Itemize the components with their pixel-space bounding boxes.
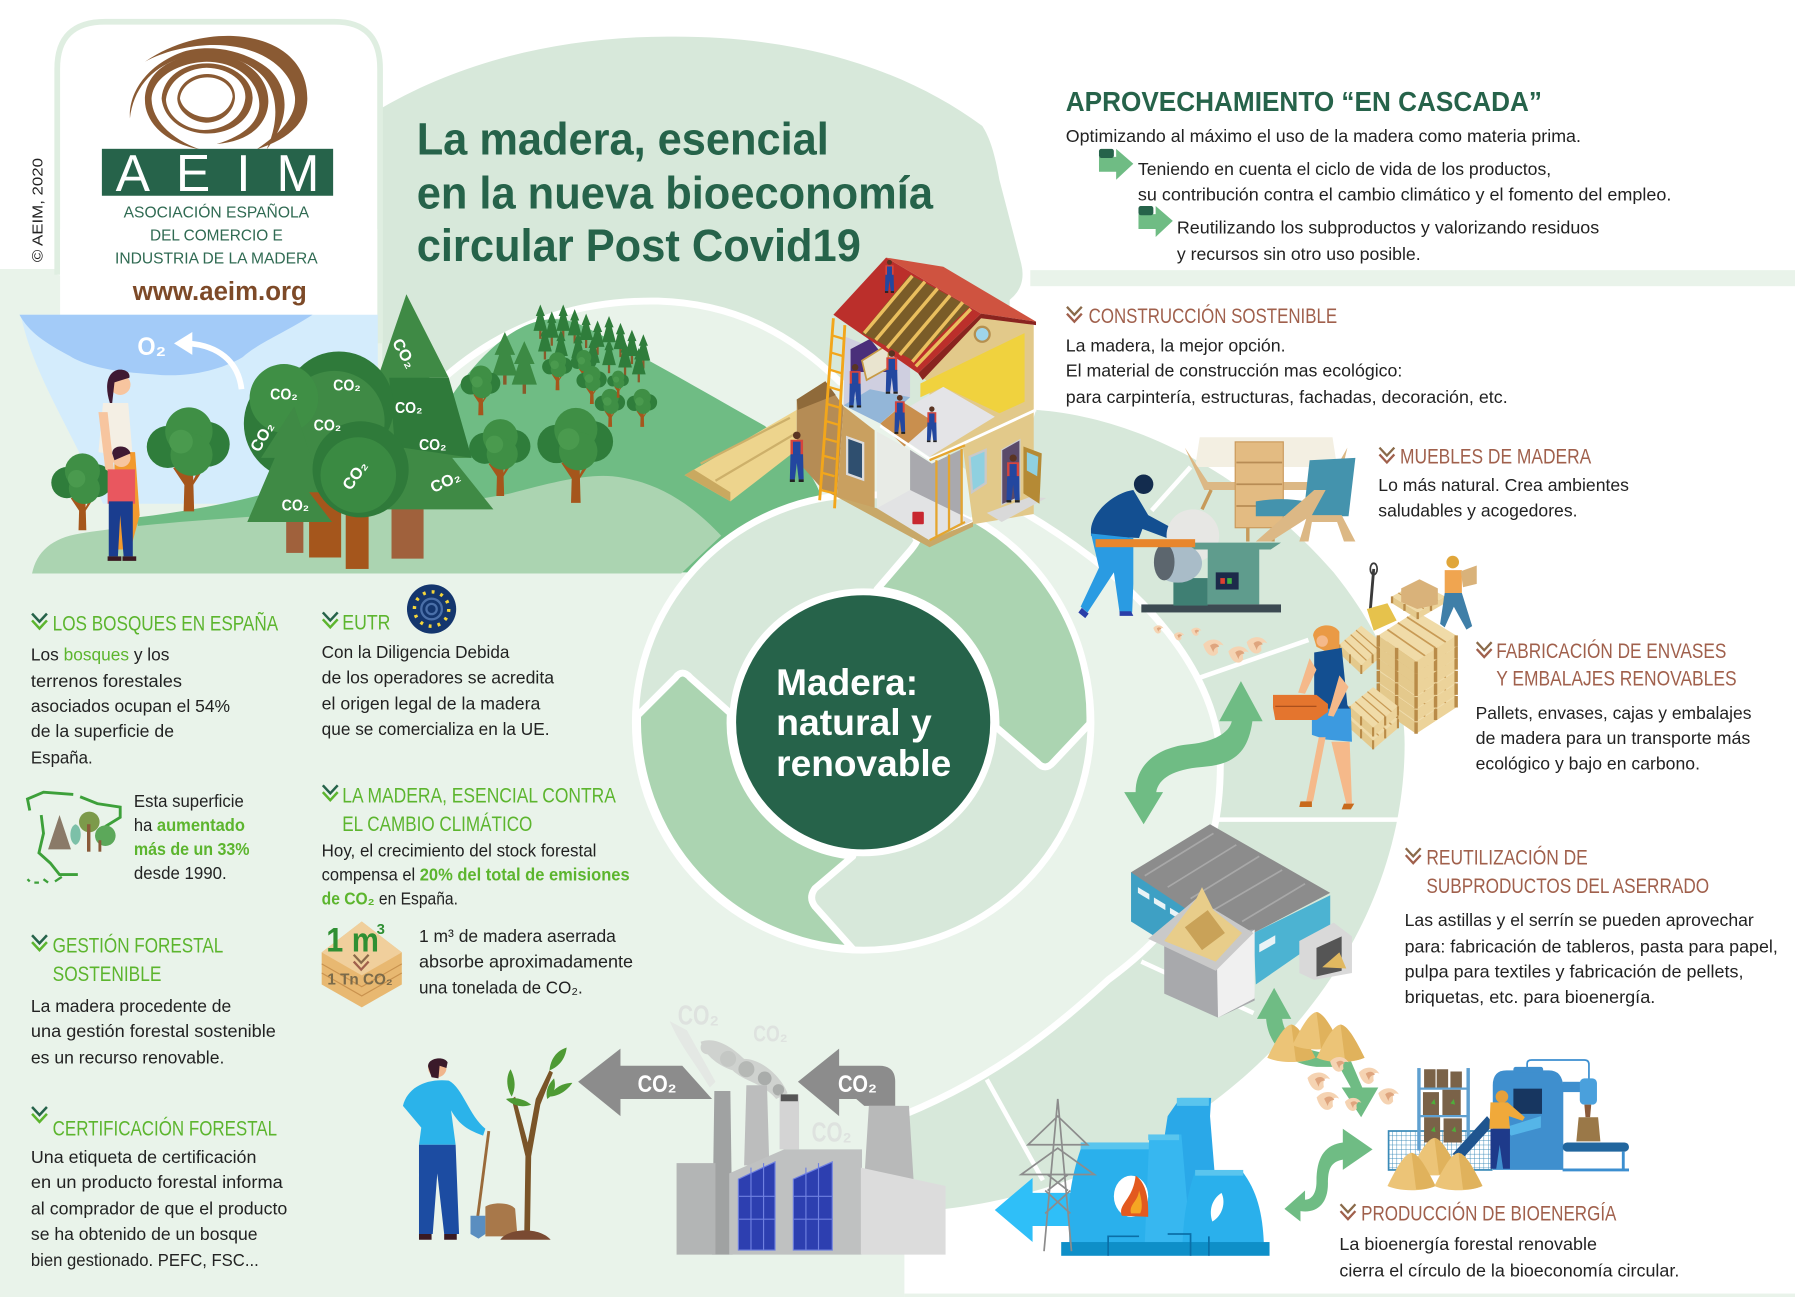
logo web address: www.aeim.org [132,276,307,306]
saw machine [1096,509,1281,612]
section: reutilización de subproductos: para: fabricación de tableros, pasta para papel, [1405,936,1778,956]
sawdust piles [1267,1012,1365,1062]
upper white arc [444,301,841,383]
right CO2 arrow [798,1049,895,1116]
section: fabricación de envases [1476,638,1752,773]
leaf [1211,1193,1223,1221]
CO2 tree labels: CO₂ [395,399,422,417]
section: los bosques en España: España. [31,748,93,768]
radial dividers [987,467,1400,1180]
furniture illustration [1185,437,1355,541]
arrow: green S curve lower [1284,1129,1373,1221]
round window [975,327,990,342]
section: certificación forestal: se ha obtenido de un bosque [31,1224,258,1244]
conveyor [1453,1116,1494,1162]
logo panel [57,22,380,343]
section: los bosques en España: LOS BOSQUES EN ESPAÑA [53,611,279,636]
text: 1 m3 absorbe CO2 [419,926,633,998]
section: muebles de madera: saludables y acogedores. [1378,500,1577,520]
text: superficie aumentada: Esta superficie [134,791,244,811]
background: bottom pale strip [904,1294,1795,1297]
woman with crates [1273,625,1354,809]
section: los bosques en España: asociados ocupan el 54% [31,696,230,716]
section: los bosques en España: terrenos forestales [31,671,182,691]
section: aprovechamiento en cascada: Optimizando al máximo el uso de la madera como materia prima. [1066,126,1581,146]
forest landscape [32,294,824,574]
section: los bosques en España: de la superficie de [31,721,174,741]
arrow: green arc through sawdust [1257,988,1378,1117]
title: en la nueva bioeconomía [417,167,933,218]
text: superficie aumentada: más de un 33% [134,839,250,859]
section: producción de bioenergía: La bioenergía forestal renovable [1339,1234,1597,1254]
left green segment [638,673,853,949]
section: gestión forestal sostenible: una gestión forestal sostenible [31,1021,276,1041]
CO2 tree labels: CO₂ [282,497,309,515]
text: 1 m3 absorbe CO2: 1 m³ de madera aserrada [419,926,616,946]
CO2 tree labels: CO₂ [333,376,361,394]
icon: wood cube 1 m3: 1 Tn CO₂ [327,971,393,988]
man planting tree illustration [403,1047,572,1240]
sawdust at machine [1387,1138,1482,1190]
section: certificación forestal: bien gestionado. PEFC, FSC... [31,1250,259,1270]
section: fabricación de envases: Y EMBALAJES RENOVABLES [1496,668,1737,691]
pallet stack [1378,611,1456,734]
workers [790,260,1020,503]
forest pines on hill [492,305,650,394]
section: muebles de madera [1378,446,1629,520]
wood shavings [1307,1057,1399,1111]
section: cambio climático: LA MADERA, ESENCIAL CONTRA [342,784,617,807]
trees near family [51,407,230,530]
family figures [98,370,140,561]
section: EUTR: el origen legal de la madera [322,694,540,714]
section: EUTR: EUTR [342,612,390,635]
section: cambio climático: de CO₂ en España. [322,888,458,908]
right CO2 arrow: CO₂ [838,1071,877,1098]
wood chips [1153,625,1267,663]
hill light [32,476,721,574]
yellow room [920,333,1025,413]
section: muebles de madera: MUEBLES DE MADERA [1400,446,1592,469]
logo association name [115,205,318,267]
section: EUTR: Con la Diligencia Debida [322,642,510,662]
section: cambio climático: compensa el 20% del total de emisiones [322,864,630,884]
icon: map of Spain with trees [27,792,120,883]
small pallet with boxes [1392,582,1445,619]
CO2 tree labels: CO₂ [270,386,298,404]
section: certificación forestal: Una etiqueta de certificación [31,1147,256,1167]
logo association name: INDUSTRIA DE LA MADERA [115,250,318,267]
section: los bosques en España [31,611,279,768]
blue room [844,337,910,424]
CO2 tree labels: CO₂ [428,467,463,497]
base [1061,1242,1270,1256]
CO2 tree labels: CO₂ [314,416,341,434]
section: aprovechamiento en cascada [1066,86,1671,264]
section: producción de bioenergía [1339,1200,1679,1280]
background: outer mint spiral band [870,410,1405,1216]
section: fabricación de envases: Pallets, envases, cajas y embalajes [1476,703,1752,723]
section: cambio climático: Hoy, el crecimiento del stock forestal [322,840,596,860]
ring disc [635,495,1091,950]
background: pale green left area [0,269,904,1297]
section: construcción sostenible: El material de construcción mas ecológico: [1066,361,1402,381]
section: cambio climático [322,784,630,908]
roof [1131,824,1330,933]
hill dark [137,319,824,572]
icon: wood cube 1 m3: 3 [377,922,385,938]
section: construcción sostenible: CONSTRUCCIÓN SOSTENIBLE [1089,303,1337,328]
section: reutilización de subproductos: pulpa para textiles y fabricación de pellets, [1405,962,1743,982]
central circle diagram [635,495,1091,950]
right green segment [877,520,1090,767]
window frame [862,343,889,380]
CO2 tree labels [247,336,463,515]
background: top-right pale strip [1030,270,1795,286]
background: top mint shape [382,37,1023,504]
hopper with chips [1164,930,1255,1018]
section: gestión forestal sostenible: La madera procedente de [31,996,231,1016]
title [417,114,933,271]
text: superficie aumentada [134,791,250,883]
logo association name: DEL COMERCIO E [150,227,283,244]
central circle [733,592,994,853]
section: reutilización de subproductos [1405,844,1778,1007]
house windows [847,437,863,480]
planks [685,410,797,501]
saw worker illustration [1078,474,1281,663]
pipes [1108,1234,1209,1256]
section: aprovechamiento en cascada: su contribución contra el cambio climático y el fomento del empleo. [1138,184,1671,204]
section: reutilización de subproductos: SUBPRODUCTOS DEL ASERRADO [1426,875,1709,898]
icon: wood cube 1 m3: 1 m [326,921,379,959]
walls [1131,872,1196,944]
machine body [1493,1060,1629,1170]
section: aprovechamiento en cascada: y recursos sin otro uso posible. [1177,244,1421,264]
shelf with bags [1417,1068,1470,1150]
paint bucket [912,512,924,524]
warehouse illustration [1131,824,1352,1018]
spiral white line [870,513,1220,1128]
front pallets [1350,687,1398,749]
plant tanks [1148,1098,1220,1243]
sky [21,315,378,504]
logo rings [130,36,307,149]
section: fabricación de envases: de madera para un transporte más [1476,728,1750,748]
smoke [670,1021,788,1099]
section: certificación forestal [31,1107,287,1270]
tree sapling [506,1047,572,1231]
CO2 faded labels: CO₂ [812,1116,852,1147]
section: construcción sostenible: para carpintería, estructuras, fachadas, decoración, etc. [1066,387,1508,407]
studs [930,445,965,540]
pellet machine illustration [1387,1060,1629,1190]
section: aprovechamiento en cascada: Teniendo en cuenta el ciclo de vida de los productos, [1138,159,1551,179]
icon: arrow two [1138,206,1173,237]
ladder [820,318,845,508]
central text: Madera: [776,662,918,703]
section: producción de bioenergía: cierra el círculo de la bioeconomía circular. [1339,1260,1679,1280]
worker [1078,474,1191,618]
CO2 tree labels: CO₂ [339,458,372,494]
icon: wood cube 1 m3 [322,921,402,1007]
arrow: green S curve upper [1124,681,1263,824]
CO2 faded labels: CO₂ [753,1021,788,1047]
section: certificación forestal: al comprador de que el producto [31,1199,287,1219]
CO2 faded labels: CO₂ [678,1000,719,1031]
CO2 tree labels: CO₂ [419,436,446,454]
section: fabricación de envases: ecológico y bajo en carbono. [1476,753,1700,773]
logo association name: ASOCIACIÓN ESPAÑOLA [124,205,310,222]
text: 1 m3 absorbe CO2: una tonelada de CO₂. [419,978,583,998]
section: reutilización de subproductos: Las astillas y el serrín se pueden aprovechar [1405,910,1754,930]
rafters [862,275,970,361]
section: EUTR: que se comercializa en la UE. [322,719,549,739]
slab [837,497,973,547]
bioenergy plant illustration [995,1098,1270,1256]
icon: EU stars seal [407,584,456,634]
lower right wall [930,410,1034,524]
section: aprovechamiento en cascada: Reutilizando los subproductos y valorizando residuos [1177,218,1599,238]
section: certificación forestal: CERTIFICACIÓN FORESTAL [53,1116,277,1141]
icon: arrow one [1099,149,1133,180]
section: EUTR [322,584,554,739]
CO2 faded labels [678,1000,852,1147]
O2 arrow [137,332,242,389]
O2 arrow: O₂ [137,333,166,361]
small pine [247,406,332,553]
background: pale spiral interior [444,301,1220,1122]
title: La madera, esencial [417,114,829,165]
round tree foreground [313,421,409,569]
central text [776,662,951,784]
factory illustration [578,1000,946,1255]
house illustration [685,258,1046,547]
ground floor interior [877,432,910,508]
CO2 tree labels: CO₂ [247,419,278,455]
section: aprovechamiento en cascada: APROVECHAMIENTO “EN CASCADA” [1066,86,1542,117]
section: producción de bioenergía: PRODUCCIÓN DE BIOENERGÍA [1361,1200,1617,1225]
section: muebles de madera: Lo más natural. Crea ambientes [1378,475,1629,495]
annex wall [797,381,844,497]
door [987,440,1046,522]
section: reutilización de subproductos: REUTILIZACIÓN DE [1426,844,1588,869]
section: gestión forestal sostenible: es un recurso renovable. [31,1047,224,1067]
section: cambio climático: EL CAMBIO CLIMÁTICO [342,811,532,836]
machine worker [1489,1090,1525,1169]
central text: renovable [776,743,951,784]
CO2 tree labels: CO₂ [388,336,419,372]
section: reutilización de subproductos: briquetas, etc. para bioenergía. [1405,987,1655,1007]
back pallet [1339,626,1385,674]
soil bag [485,1203,517,1236]
lower left wall [837,406,875,512]
central text: natural y [776,702,932,743]
section: construcción sostenible [1066,303,1508,407]
pallet jack [1367,563,1397,631]
blue arrow [995,1178,1076,1242]
chimneys [712,1085,799,1255]
roof [833,258,981,373]
title: circular Post Covid19 [417,220,861,271]
small round trees on hill [461,350,657,427]
mound [500,1230,551,1240]
pallets and workers illustration [1273,556,1477,809]
left CO2 arrow [578,1049,712,1116]
electricity tower [1021,1099,1094,1251]
cluster of round trees [244,351,394,557]
section: certificación forestal: en un producto forestal informa [31,1172,283,1192]
cooling tower [864,1106,914,1179]
shovel [471,1131,489,1239]
text: superficie aumentada: ha aumentado [134,815,245,835]
factory buildings [677,1163,715,1255]
section: fabricación de envases: FABRICACIÓN DE ENVASES [1496,638,1726,663]
medium round trees [469,408,613,503]
section: gestión forestal sostenible: SOSTENIBLE [53,963,161,986]
gable wall [918,314,1034,457]
text: 1 m3 absorbe CO2: absorbe aproximadamente [419,951,633,971]
section: gestión forestal sostenible [31,932,276,1067]
man [403,1058,485,1240]
section: construcción sostenible: La madera, la mejor opción. [1066,335,1286,355]
section: gestión forestal sostenible: GESTIÓN FORESTAL [53,932,223,957]
fence [1389,1131,1492,1170]
flame window [1114,1176,1148,1217]
container [1299,923,1352,980]
pine tree large [339,294,493,559]
sky cloud [19,315,313,375]
text: superficie aumentada: desde 1990. [134,863,227,883]
left CO2 arrow: CO₂ [638,1071,677,1098]
section: EUTR: de los operadores se acredita [322,667,554,687]
carrying worker [1440,556,1477,630]
section: los bosques en España: Los bosques y los [31,645,170,665]
logo bar AEIM: AEIM [116,144,319,202]
copyright: © AEIM, 2020 [30,158,46,262]
factory windows [738,1162,832,1250]
upper floor [880,387,995,457]
